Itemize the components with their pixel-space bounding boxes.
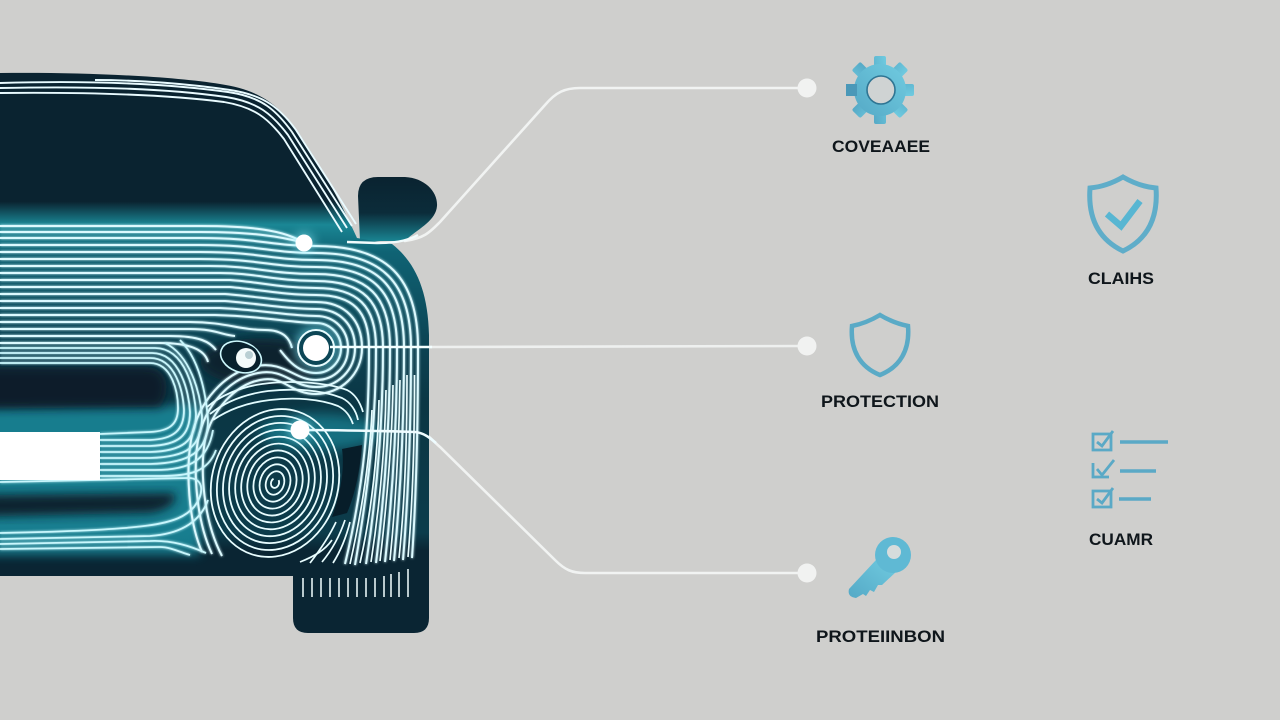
upper node (294, 233, 314, 253)
mirror (358, 177, 437, 241)
icon: shield with check (1090, 177, 1156, 251)
lower beam (300, 430, 436, 443)
car body (0, 73, 429, 633)
label: claims: CLAIHS (1088, 269, 1154, 288)
number plate (0, 432, 100, 480)
infographic canvas (0, 56, 1168, 642)
arcs above the fingerprint (207, 382, 363, 424)
lower node glow (260, 414, 380, 450)
connector end dots (798, 78, 816, 582)
icon: checklist (1093, 431, 1168, 507)
fingerprint spiral (192, 392, 358, 574)
label: protection: PROTECTION (821, 392, 939, 411)
icon: gear (846, 56, 914, 124)
extra fan lines (300, 375, 414, 564)
hood contour lines (0, 226, 418, 565)
main headlight (294, 326, 338, 370)
upper grille (0, 367, 167, 409)
lower node (289, 419, 311, 441)
label: coverage: COVEAAEE (832, 137, 930, 156)
label: protection variant: PROTEIINBON (816, 627, 945, 646)
label: cuamr: CUAMR (1089, 530, 1153, 549)
light beam (330, 346, 432, 348)
icon: shield (852, 315, 908, 375)
connector lines (405, 88, 807, 573)
dark lamp surround (200, 338, 324, 386)
car illustration (0, 73, 437, 633)
grille glow (0, 338, 380, 555)
windshield outline lines (0, 80, 356, 232)
mirror base line (347, 235, 418, 243)
bumper ticks (303, 569, 408, 597)
dark side vent (332, 445, 362, 517)
lower grille (0, 493, 176, 517)
grille contour lines (0, 340, 216, 555)
small headlight (216, 336, 266, 378)
icon: key (849, 537, 911, 598)
